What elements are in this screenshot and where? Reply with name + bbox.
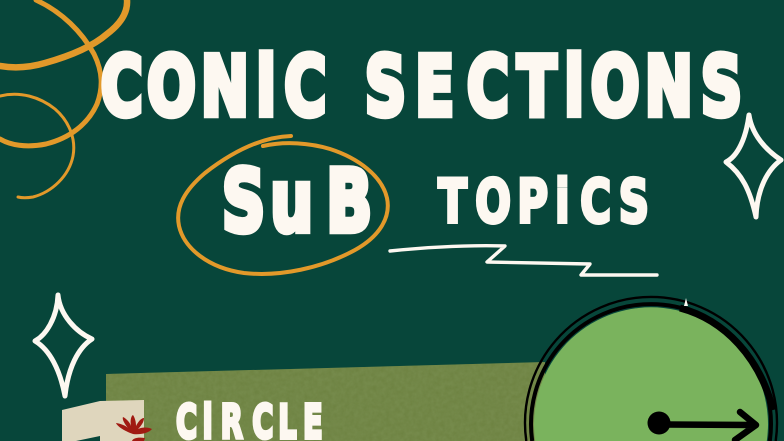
icon: red flower bbox=[116, 415, 152, 441]
radius dot bbox=[648, 412, 670, 434]
panel background bbox=[106, 362, 545, 441]
sketch outline bbox=[525, 297, 777, 441]
heading: Sub: SuB bbox=[222, 151, 372, 252]
small white mark bbox=[684, 298, 688, 306]
icon: sparkle left bbox=[35, 295, 92, 396]
decorative orange scribbles bbox=[0, 0, 127, 198]
circle diagram bbox=[525, 297, 777, 441]
orange ellipse around Sub bbox=[178, 136, 388, 274]
icon: sparkle right bbox=[726, 115, 781, 217]
title: CONiC SECTiONS bbox=[101, 39, 742, 135]
green disc bbox=[534, 307, 768, 441]
radius arrow bbox=[665, 412, 756, 440]
squiggle underline bbox=[390, 246, 657, 275]
panel: circle topic bbox=[62, 362, 545, 441]
paper tape bbox=[62, 400, 144, 441]
heading: Topics: TOPiCS bbox=[438, 168, 649, 237]
